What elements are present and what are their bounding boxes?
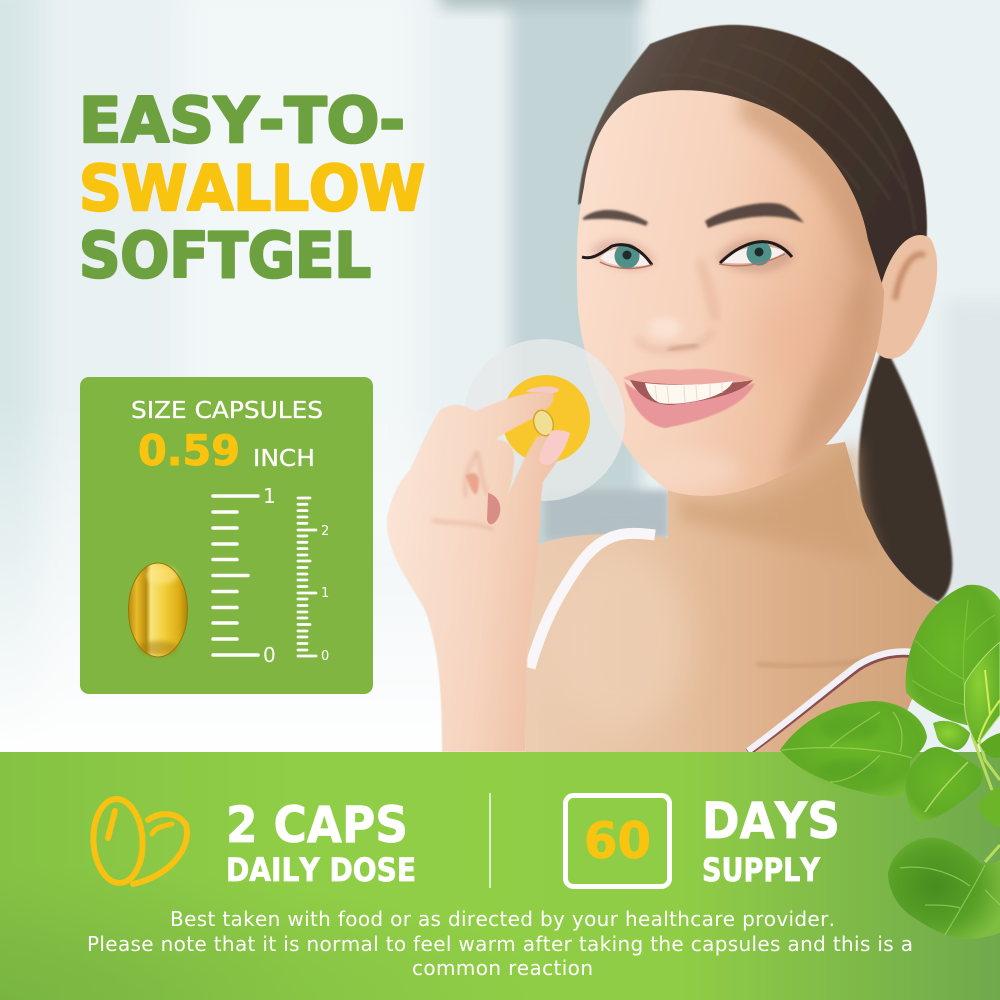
translucent circle callout	[463, 339, 625, 501]
left strap	[530, 533, 655, 668]
yellow circle	[502, 375, 590, 463]
centimetre labels: 1	[321, 586, 329, 601]
forearm and palm	[387, 392, 567, 752]
face shading	[669, 97, 877, 487]
softgel capsule in fingers	[530, 408, 557, 438]
unit: INCH	[253, 446, 315, 472]
right eye	[716, 237, 795, 273]
headline	[79, 84, 425, 292]
oregano leaves	[780, 585, 1000, 939]
leaf: top	[906, 585, 1000, 726]
headline: SWALLOW	[79, 152, 425, 225]
softgel capsule	[128, 563, 188, 657]
inch labels: 0	[263, 643, 276, 667]
teeth	[645, 381, 733, 404]
centimetre labels	[321, 524, 329, 664]
usage note: Best taken with food or as directed by your healthcare provider.	[170, 907, 835, 931]
stat icon: 60 box: 60	[584, 812, 651, 870]
usage note: common reaction	[412, 956, 593, 980]
mouth	[630, 380, 753, 405]
stat: 2 caps daily dose: DAILY DOSE	[226, 851, 416, 889]
upper lip	[623, 369, 754, 385]
chest highlight	[550, 550, 690, 730]
leaf: small upper	[933, 721, 970, 750]
ponytail	[858, 345, 952, 602]
centimetre labels: 2	[321, 524, 329, 539]
index nail	[526, 387, 559, 393]
panel: capsule size	[80, 377, 373, 694]
leaf: bottom	[888, 838, 1000, 939]
thumb nail	[539, 430, 570, 465]
centimetre ruler	[298, 498, 316, 656]
inch labels	[263, 484, 276, 667]
icon: two capsules	[91, 798, 187, 884]
face	[577, 90, 884, 496]
collarbone	[757, 656, 887, 666]
stat: 60 days supply: DAYS	[702, 792, 840, 850]
torso	[526, 442, 938, 752]
left eye	[582, 239, 655, 270]
leaf: right	[964, 642, 1000, 745]
curled finger shadow	[466, 473, 479, 494]
nose	[636, 317, 714, 351]
leaf: middle	[905, 747, 983, 822]
lower lip	[624, 381, 755, 428]
size value: 0.59	[138, 426, 240, 475]
ear	[875, 235, 937, 359]
headline: SOFTGEL	[79, 219, 371, 292]
stat: 2 caps daily dose: 2 CAPS	[226, 796, 408, 854]
centimetre labels: 0	[321, 649, 329, 664]
inch labels: 1	[263, 484, 276, 508]
neck shadow	[680, 440, 880, 560]
headline: EASY-TO-	[79, 84, 405, 157]
stat: 60 days supply: SUPPLY	[702, 851, 821, 889]
usage note: Please note that it is normal to feel warm after taking the capsules and this is a	[87, 932, 913, 956]
stems	[972, 725, 1000, 862]
curled fingernail	[487, 493, 500, 524]
panel heading: SIZE CAPSULES	[131, 398, 323, 424]
background: blurred window room	[0, 0, 1000, 770]
finger creases	[432, 451, 493, 530]
woman portrait	[526, 25, 952, 752]
usage note	[87, 907, 913, 980]
leaf: right small	[978, 787, 1000, 827]
leaf: large left	[780, 701, 927, 797]
hair	[578, 25, 927, 300]
hair strands	[660, 45, 915, 230]
hand and forearm	[387, 387, 570, 752]
stat icon: 60 box	[566, 796, 670, 886]
right strap	[748, 654, 912, 752]
stat: 60 days supply	[702, 792, 840, 889]
stat: 2 caps daily dose	[226, 796, 416, 889]
eyebrows	[583, 210, 648, 226]
bottom green band	[0, 752, 1000, 1000]
inch ruler	[213, 496, 258, 655]
